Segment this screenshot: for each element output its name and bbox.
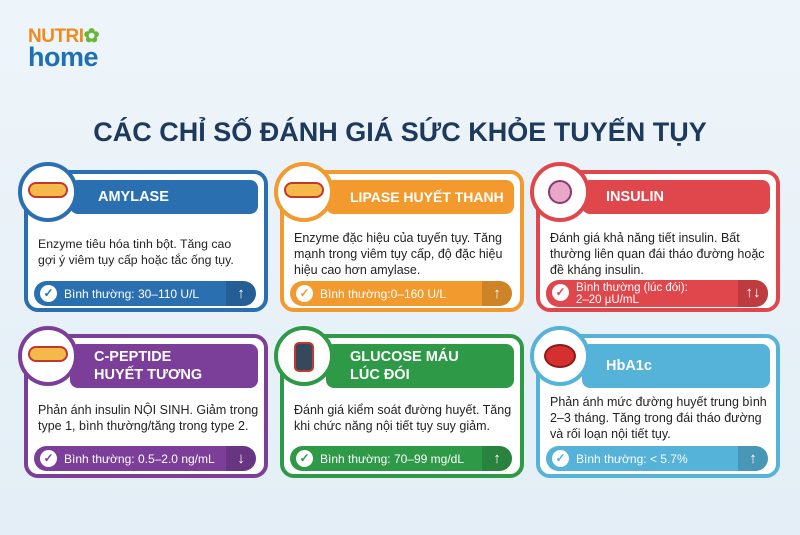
panel: c-peptide: HUYẾT TƯƠNG: [94, 367, 202, 383]
panel: c-peptide: ↓: [237, 450, 245, 467]
panel: glucose: GLUCOSE MÁU: [350, 349, 459, 365]
panel: amylase: ✓: [43, 286, 54, 300]
panel: insulin: Bình thường (lúc đói):: [576, 282, 688, 294]
panel: insulin: [536, 170, 780, 312]
panel: lipase: [280, 170, 524, 312]
panel: c-peptide: Phản ánh insulin NỘI SINH. Giảm trong type 1, bình thường/tăng trong type 2.: [38, 403, 258, 433]
panel: c-peptide: ✓: [43, 451, 54, 465]
panel: insulin: Đánh giá khả năng tiết insulin. Bất thường liên quan đái tháo đường hoặc đề kháng insulin.: [550, 231, 765, 277]
panel: insulin: ↑↓: [746, 284, 760, 301]
panel: lipase: LIPASE HUYẾT THANH: [350, 189, 504, 205]
icon: red blood cell: [530, 326, 590, 386]
panel: hba1c: [536, 334, 780, 478]
title: CÁC CHỈ SỐ ĐÁNH GIÁ SỨC KHỎE TUYẾN TỤY: [93, 117, 707, 147]
icon: pancreas drop: [274, 162, 334, 222]
panel: amylase: Enzyme tiêu hóa tinh bột. Tăng cao gợi ý viêm tụy cấp hoặc tắc ống tụy.: [38, 237, 234, 267]
panel: lipase: ↑: [493, 285, 501, 302]
panel: hba1c: Phản ánh mức đường huyết trung bình 2–3 tháng. Tăng trong đái tháo đường và rối loạn nội tiết tụy.: [550, 395, 767, 441]
panel: glucose: Đánh giá kiểm soát đường huyết. Tăng khi chức năng nội tiết tụy suy giảm.: [294, 403, 511, 433]
panel: glucose: ↑: [493, 450, 501, 467]
icon: cell: [530, 162, 590, 222]
panel: amylase: Bình thường: 30–110 U/L: [64, 286, 199, 300]
panel: insulin: ✓: [555, 285, 566, 299]
panel: hba1c: Bình thường: < 5.7%: [576, 452, 688, 466]
panel: hba1c: ✓: [555, 451, 566, 465]
icon: pancreas: [18, 162, 78, 222]
panel: lipase: ✓: [299, 286, 310, 300]
panel: insulin: INSULIN: [606, 189, 664, 205]
icon: pancreas molecule: [18, 326, 78, 386]
logo: home: [28, 42, 98, 72]
panel: c-peptide: C-PEPTIDE: [94, 349, 171, 365]
panel: hba1c: ↑: [749, 450, 757, 467]
icon: glucometer: [274, 326, 334, 386]
logo: [28, 26, 99, 72]
logo: NUTRI✿: [28, 26, 99, 47]
panel: amylase: ↑: [237, 285, 245, 302]
panel: insulin: 2–20 µU/mL: [576, 294, 639, 306]
panel: lipase: Bình thường:0–160 U/L: [320, 286, 446, 300]
panel: hba1c: HbA1c: [606, 358, 652, 374]
panel: c-peptide: [24, 334, 268, 478]
panel: amylase: [24, 170, 268, 312]
panel: amylase: AMYLASE: [98, 189, 169, 205]
panel: lipase: Enzyme đặc hiệu của tuyến tụy. Tăng mạnh trong viêm tụy cấp, độ đặc hiệu hiệu cao hơn amylase.: [294, 231, 502, 277]
panel: glucose: [280, 334, 524, 478]
panel: c-peptide: Bình thường: 0.5–2.0 ng/mL: [64, 452, 215, 466]
panel: glucose: LÚC ĐÓI: [350, 367, 410, 383]
panel: glucose: ✓: [299, 451, 310, 465]
panel: glucose: Bình thường: 70–99 mg/dL: [320, 452, 464, 466]
